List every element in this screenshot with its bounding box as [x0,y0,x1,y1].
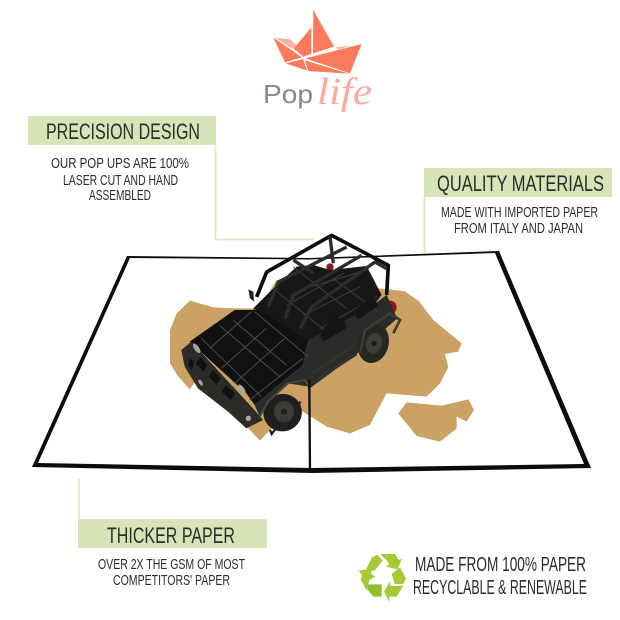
kraft paper map base [170,280,462,441]
side windows [320,315,346,342]
hood grid [190,310,308,405]
open pop-up card [32,235,591,473]
panel: recyclable note [358,554,587,602]
heading: THICKER PAPER [107,523,235,548]
description: COMPETITORS' PAPER [113,572,230,589]
logo word: Pop: Pop [263,79,313,109]
jeep side body [303,295,397,389]
description [51,155,189,204]
heading band [28,116,216,145]
jeep pop-up model [181,235,400,437]
heading band [424,168,612,197]
cabin interior [253,265,382,345]
logo word: life: life [317,71,372,113]
logo: Poplife paper boat [263,10,372,113]
kraft paper island [398,399,474,442]
front grille and bumper [181,342,263,428]
roll cage [257,235,388,329]
front wheel [258,388,307,437]
mirror [248,289,254,302]
connector lines [79,145,424,519]
icon: paper boat [273,10,362,74]
card page with black border [32,251,591,473]
front fender panel [255,365,310,417]
description [98,556,245,589]
description: ASSEMBLED [89,187,151,204]
lower fold line [306,380,313,472]
side step rails [310,345,357,384]
icon: recycle [358,554,406,602]
recycle text [413,554,587,599]
rear fender [360,313,400,353]
heading band [78,519,267,548]
red spare wheel parts [326,263,334,271]
description [441,204,598,237]
rear wheel [353,320,393,367]
panel: quality materials [424,168,612,237]
description: OVER 2X THE GSM OF MOST [98,556,245,573]
description: LASER CUT AND HAND [63,172,178,189]
panel: precision design [28,116,216,204]
heading: PRECISION DESIGN [46,119,200,144]
description: OUR POP UPS ARE 100% [51,155,189,172]
front fender trim [260,380,310,417]
cabin cell grid [273,267,378,332]
panel: thicker paper [78,519,267,589]
